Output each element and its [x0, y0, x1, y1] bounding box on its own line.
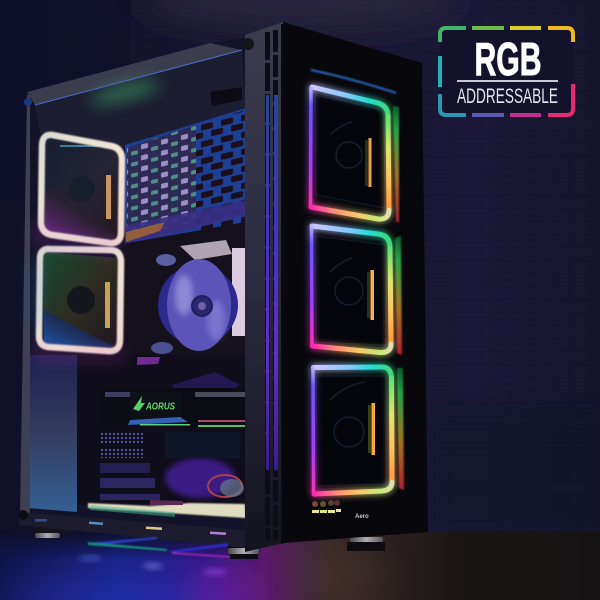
black front panel	[283, 22, 428, 543]
case feet	[34, 525, 385, 559]
left fan upper	[45, 139, 120, 240]
bottom board purple glow	[165, 458, 235, 498]
badge RGB title: RGB	[474, 33, 542, 85]
orange light bars	[365, 138, 375, 455]
rgb addressable badge	[440, 28, 573, 115]
left ring upper	[41, 135, 122, 243]
front ring middle	[312, 226, 391, 353]
badge divider	[457, 80, 558, 82]
vertical side strip of case	[242, 22, 283, 552]
left fan lower	[44, 252, 120, 348]
aerocool logo: Aero	[355, 514, 369, 520]
rear panel with mesh	[125, 108, 246, 250]
expansion slots	[100, 432, 160, 500]
top slit light	[311, 70, 396, 93]
aorus logo	[133, 396, 175, 412]
left ring glows	[36, 220, 125, 356]
interior ceiling	[35, 50, 246, 148]
side strip vent columns	[268, 30, 276, 540]
underglow leds	[88, 537, 230, 558]
left ring lower	[39, 249, 121, 351]
bottom light bar	[88, 503, 246, 518]
glass screws	[24, 98, 32, 106]
motherboard upper section	[122, 222, 246, 360]
interior ceiling dark block	[210, 87, 242, 106]
front ring bottom	[313, 367, 392, 494]
front ring top	[310, 87, 389, 219]
floor with colored reflections	[0, 531, 600, 600]
case bottom rail	[18, 510, 246, 558]
side strip lights	[266, 95, 278, 470]
lower motherboard area	[77, 355, 246, 505]
left side column	[28, 355, 77, 512]
green ceiling glow	[88, 76, 162, 108]
graphics card	[174, 388, 234, 396]
mesh leds	[312, 500, 341, 513]
aorus logo: AORUS	[145, 400, 175, 412]
top glass band	[27, 43, 242, 105]
glass edge line	[35, 50, 242, 105]
front fan interiors	[315, 95, 386, 486]
badge rainbow border	[440, 28, 573, 115]
cpu cooler fan	[151, 254, 238, 354]
green and red side light strips	[393, 106, 404, 490]
ram sticks	[232, 248, 245, 336]
